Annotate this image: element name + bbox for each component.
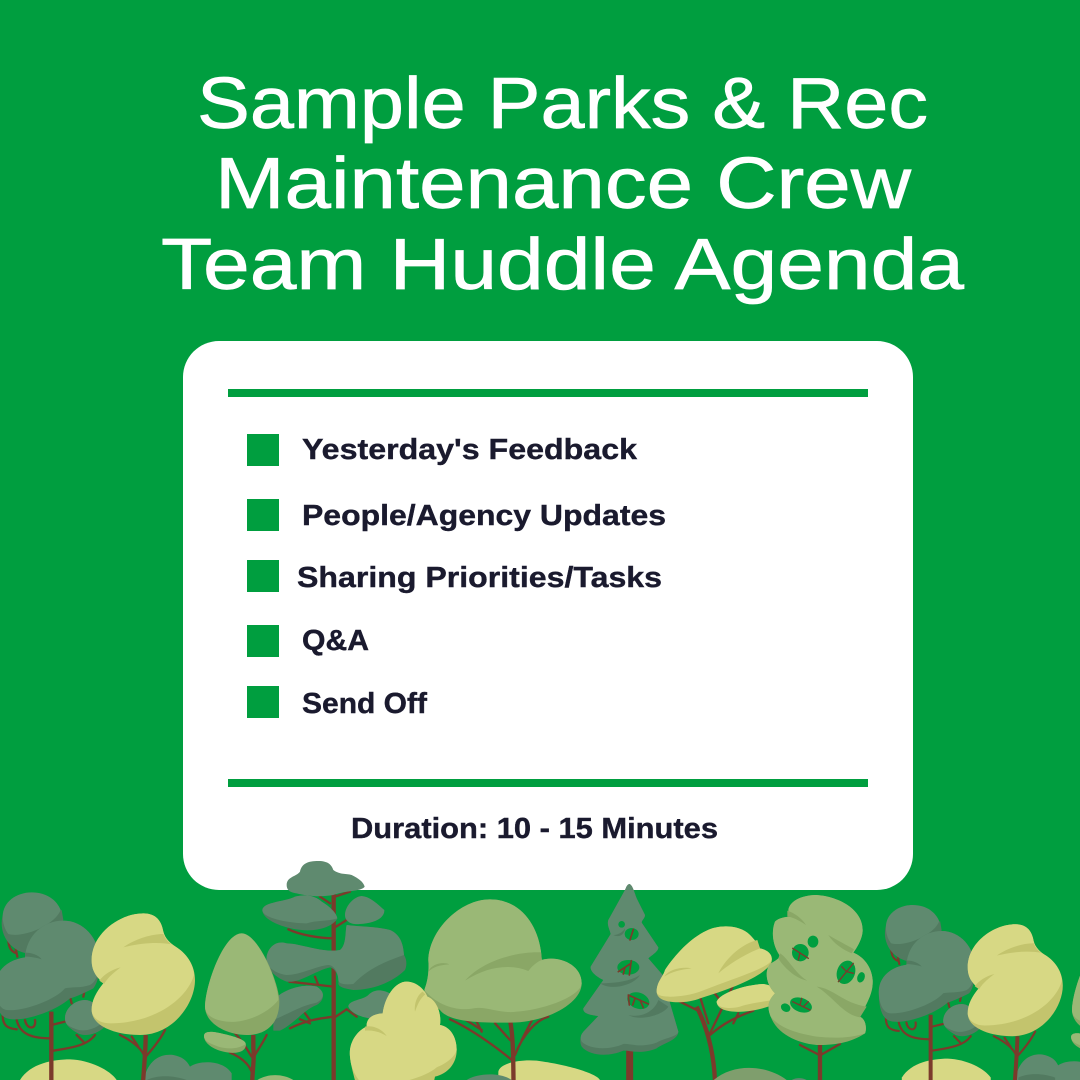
illustration: small yellow bush (350, 982, 457, 1080)
agenda item: Q&A (247, 625, 369, 657)
agenda item: Yesterday's Feedback: Yesterday's Feedback (302, 434, 638, 466)
title: Team Huddle Agenda (161, 225, 965, 305)
illustration: fir tree (580, 884, 678, 1080)
illustration: olive blob tree with leaf holes (767, 895, 873, 1080)
agenda item: Send Off: Send Off (302, 688, 427, 720)
illustration: large olive tree (424, 899, 600, 1080)
title: Maintenance Crew (215, 144, 912, 224)
illustration: flat yellow tree (657, 926, 807, 1080)
title (161, 64, 965, 305)
title: Sample Parks & Rec (197, 64, 928, 144)
agenda item: People/Agency Updates: People/Agency Updates (302, 500, 666, 532)
illustration: pine tree with cloud foliage (262, 861, 406, 1080)
illustration: right tree group (dark, yellow, olive trees) (879, 905, 1080, 1080)
duration note: Duration: 10 - 15 Minutes (351, 813, 718, 845)
agenda item: Sharing Priorities/Tasks: Sharing Priorities/Tasks (297, 562, 662, 594)
panel: agenda card (183, 341, 913, 890)
agenda item: Send Off (247, 686, 427, 720)
agenda item: Q&A: Q&A (302, 625, 369, 657)
illustration: left tree group (dark, yellow, olive trees) (0, 892, 293, 1080)
